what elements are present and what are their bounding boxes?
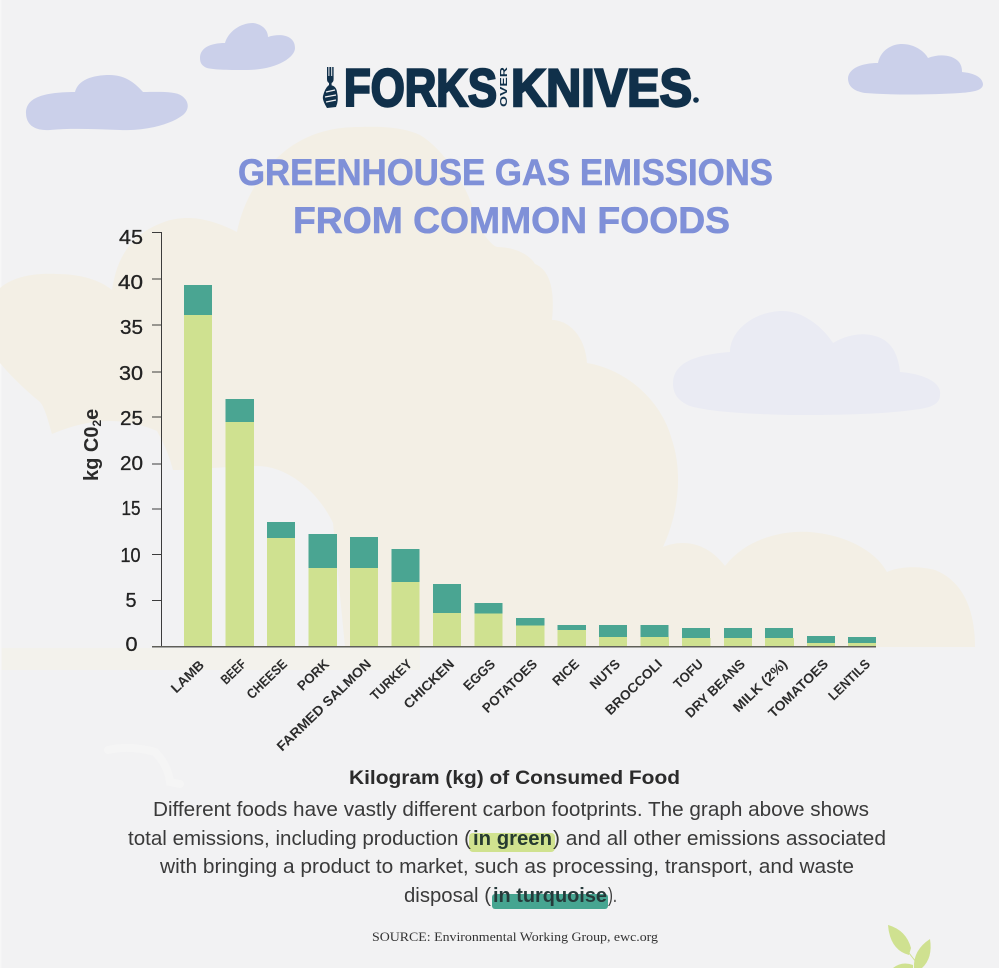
icon: fork in hand [323,67,338,108]
description paragraph: in turquoise [493,885,607,907]
title: GREENHOUSE GAS EMISSIONS [238,152,773,193]
x axis category labels: CHICKEN [401,656,457,712]
bar: beef [226,399,254,646]
y axis numbers: 35 [120,317,143,339]
description paragraph: with bringing a product to market, such as processing, transport, and waste [159,856,854,878]
y axis numbers: 30 [119,363,143,385]
y axis numbers [118,227,143,656]
description paragraph: ) and all other emissions associated [553,828,886,850]
y axis title: 2 [90,420,104,427]
description paragraph: in green [473,828,552,850]
cloud: top right [848,44,983,94]
bar: broccoli [640,625,669,646]
x axis category labels: FARMED SALMON [274,656,374,754]
background: large beige cloud [0,127,975,647]
description paragraph: total emissions, including production ( [128,828,471,850]
bar: tofu [682,628,710,646]
bar: dry beans [724,628,752,646]
bar: tomatoes [807,636,835,646]
logo wordmark: FORKS: FORKS [344,59,497,118]
icon: green leaves [888,925,931,968]
bar: milk [765,628,794,646]
x axis category labels: POTATOES [479,656,540,716]
y axis numbers: 45 [119,227,143,249]
decorative faint white cloud [108,748,180,784]
x axis category labels: LENTILS [825,656,873,703]
description paragraph: disposal ( [404,885,491,907]
x axis category labels: LAMB [168,657,207,696]
cloud: top left [26,75,188,130]
bar: lamb [184,285,212,646]
bar: nuts [599,625,627,646]
x axis category labels: BROCCOLI [602,656,665,718]
bar: cheese [267,522,295,646]
y axis title: kg C0 [81,427,103,481]
stacked bars [184,285,876,646]
y axis numbers: 20 [120,453,143,475]
highlight: turquoise [492,894,608,909]
bar: lentils [848,637,876,646]
logo wordmark: OVER: OVER [499,66,510,107]
bar: pork [308,534,337,646]
y axis title: e [81,409,103,420]
y axis line and ticks [152,232,162,647]
bar: eggs [474,603,502,646]
x axis category labels: NUTS [587,656,623,692]
highlight: green [469,833,555,852]
y axis numbers: 25 [120,408,143,430]
background: faint lilac cloud [673,311,940,415]
x axis category labels: PORK [294,656,332,694]
x axis category labels: CHEESE [244,656,290,702]
x axis category labels: EGGS [460,656,498,694]
y axis numbers: 5 [126,590,136,612]
x axis category labels: BEEF [218,656,249,687]
x axis line [152,646,876,648]
x axis category labels: TOFU [670,656,706,691]
bar: turkey [392,549,420,646]
description paragraph [128,799,886,909]
chart: stacked bar chart of emissions [81,227,876,789]
x axis title: Kilogram (kg) of Consumed Food [349,768,680,789]
y axis numbers: 40 [118,272,143,294]
x axis category labels: TOMATOES [765,656,831,721]
x axis category labels: MILK (2%) [730,656,790,715]
x axis category labels: TURKEY [367,656,415,703]
x axis category labels: DRY BEANS [682,656,748,721]
bar: chicken [433,584,461,646]
source note: SOURCE: Environmental Working Group, ewc.org [372,930,659,944]
bar: rice [558,625,586,646]
title: FROM COMMON FOODS [293,200,730,241]
title [238,152,773,241]
description paragraph: Different foods have vastly different carbon footprints. The graph above shows [153,799,869,821]
bar: potatoes [516,618,544,646]
cloud: top centre [200,23,295,70]
logo registered mark [693,97,699,103]
logo: Forks Over Knives [323,59,699,118]
y axis numbers: 15 [122,498,140,520]
y axis numbers: 10 [120,545,140,567]
x axis category labels [168,656,873,754]
bar: farmed salmon [350,537,378,646]
description paragraph: ). [608,885,617,907]
x axis category labels: RICE [549,656,582,689]
logo wordmark: KNIVES: KNIVES [511,59,692,118]
y axis numbers: 0 [126,634,138,656]
